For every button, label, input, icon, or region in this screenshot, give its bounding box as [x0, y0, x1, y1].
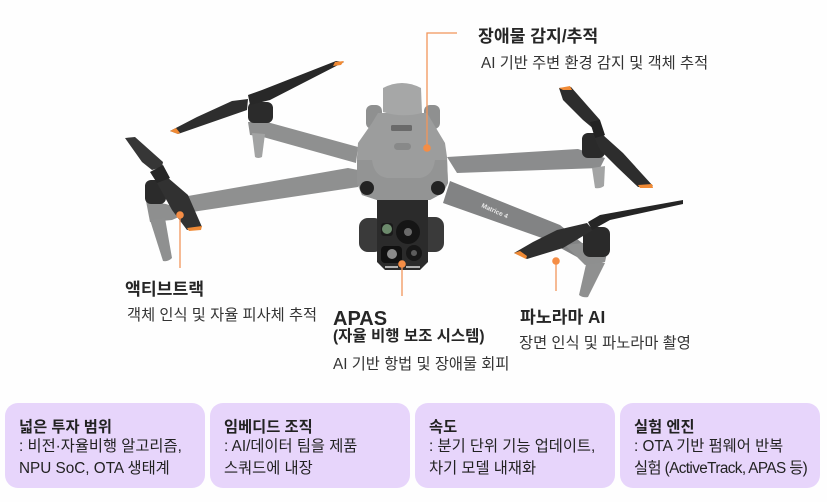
rear left arm: [248, 102, 358, 163]
card: broad investment: 넓은 투자 범위: [19, 419, 112, 436]
description: ActiveTrack: 객체 인식 및 자율 피사체 추적: [127, 307, 317, 324]
card: speed: : 분기 단위 기능 업데이트,: [429, 438, 595, 455]
card: embedded organization: 스쿼드에 내장: [224, 460, 313, 477]
description: panorama AI: 장면 인식 및 파노라마 촬영: [519, 335, 691, 352]
leader line: obstacle tracking: [423, 33, 457, 152]
front right arm: [443, 181, 610, 297]
heading: obstacle detection: 장애물 감지/추적: [478, 26, 598, 46]
description: obstacle detection: AI 기반 주변 환경 감지 및 객체 추적: [481, 55, 708, 72]
card: embedded organization: [210, 403, 410, 488]
description: APAS: AI 기반 항법 및 장애물 회피: [333, 356, 509, 373]
card: experiment engine: 실험 엔진: [634, 419, 695, 436]
card: broad investment: NPU SoC, OTA 생태계: [19, 460, 170, 477]
leader line: APAS: [398, 260, 406, 296]
drone body: [357, 83, 448, 200]
card: speed: 차기 모델 내재화: [429, 460, 536, 477]
front left propeller: [125, 137, 202, 231]
rear right propeller: [559, 86, 653, 188]
card: experiment engine: [620, 403, 820, 488]
front left arm: [145, 168, 358, 261]
arm label: Matrice 4: [480, 202, 509, 220]
card: experiment engine: 실험 (ActiveTrack, APAS 등): [634, 460, 807, 477]
card: broad investment: [5, 403, 205, 488]
card: embedded organization: 임베디드 조직: [224, 419, 313, 436]
rear right arm: [447, 133, 605, 188]
subheading: APAS: (자율 비행 보조 시스템): [333, 328, 485, 345]
card: speed: 속도: [429, 419, 457, 436]
heading: APAS: APAS: [333, 308, 387, 330]
leader line: panorama AI: [552, 257, 560, 291]
card: broad investment: : 비전·자율비행 알고리즘,: [19, 438, 182, 455]
camera gimbal: [359, 200, 444, 270]
heading: panorama AI: 파노라마 AI: [520, 307, 605, 327]
card: experiment engine: : OTA 기반 펌웨어 반복: [634, 438, 783, 455]
heading: ActiveTrack: 액티브트랙: [125, 279, 204, 299]
front right propeller: [514, 200, 683, 259]
card: speed: [415, 403, 615, 488]
rear left propeller: [170, 61, 344, 134]
leader line: ActiveTrack: [176, 211, 184, 268]
card: embedded organization: : AI/데이터 팀을 제품: [224, 438, 357, 455]
